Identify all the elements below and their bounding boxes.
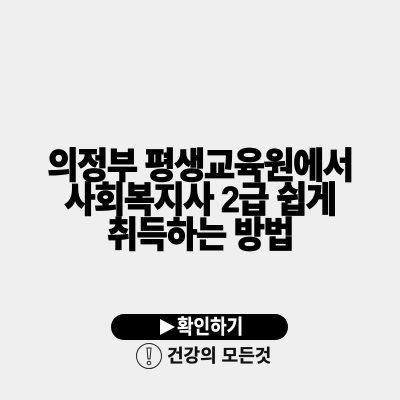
title — [47, 145, 353, 255]
title: 의정부 평생교육원에서 — [47, 145, 353, 186]
icon: exclamation circle — [136, 343, 162, 369]
button: 확인하기 — [111, 314, 288, 340]
brand label: 건강의 모든것 — [167, 346, 271, 366]
title: 취득하는 방법 — [107, 214, 293, 255]
title: 사회복지사 2급 쉽게 — [64, 179, 336, 220]
button: 확인하기: 확인하기 — [177, 316, 243, 338]
